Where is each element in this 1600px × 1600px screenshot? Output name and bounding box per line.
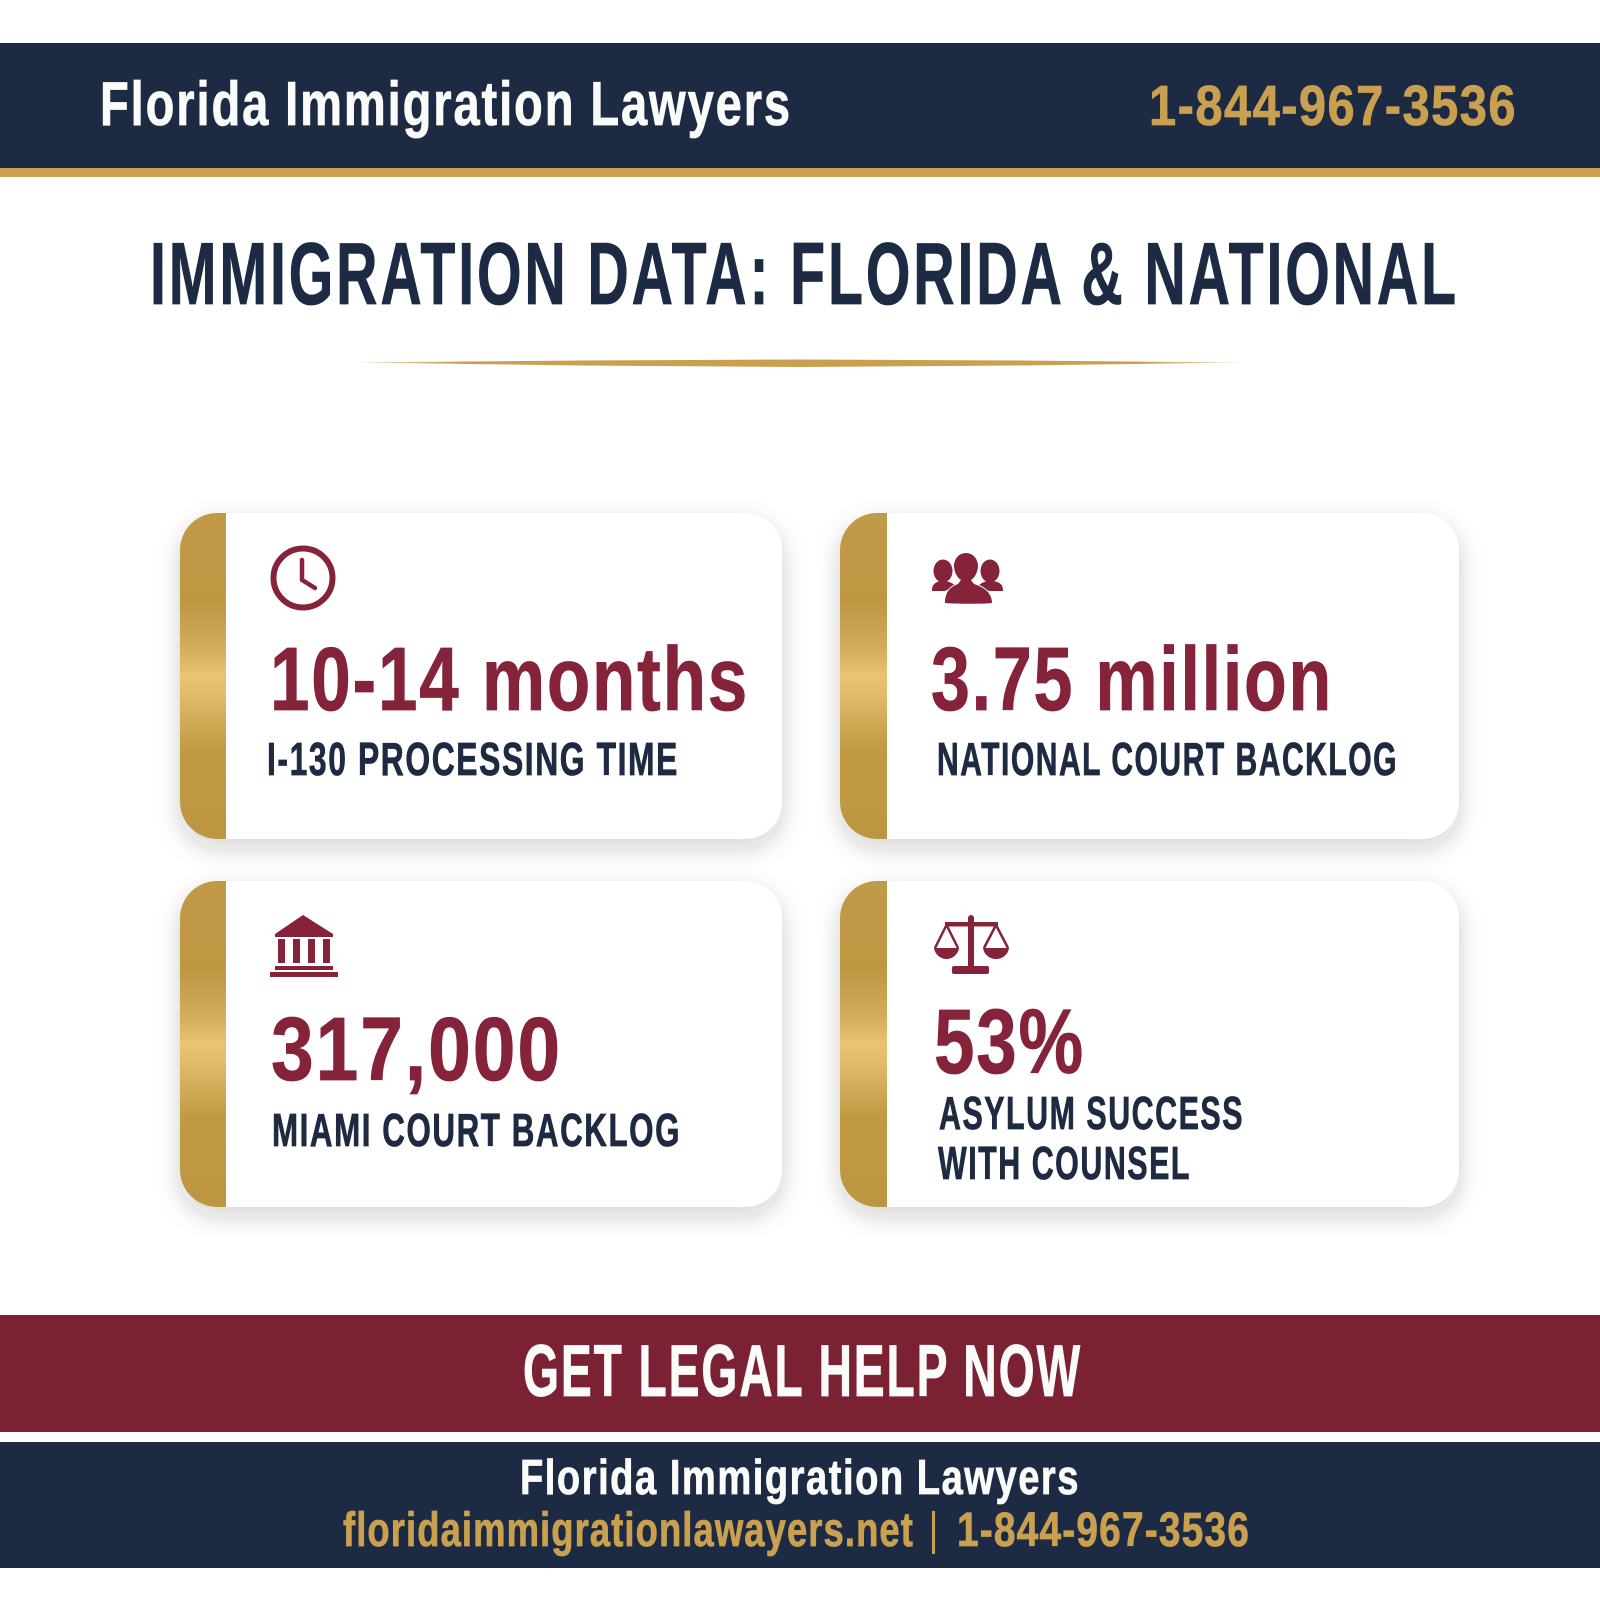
header firm name: Florida Immigration Lawyers	[100, 70, 792, 139]
stat: 10-14 months: 10-14 months	[270, 630, 749, 730]
panel: national court backlog	[840, 513, 1459, 839]
header bar	[0, 43, 1600, 177]
panel: Miami court backlog	[180, 881, 782, 1207]
stat: 3.75 million: 3.75 million	[931, 630, 1333, 730]
label: asylum success with counsel: WITH COUNSEL	[938, 1137, 1191, 1189]
call to action banner	[0, 1315, 1600, 1432]
icon: people	[932, 553, 1003, 604]
stat: 53%: 53%	[934, 991, 1085, 1093]
icon: courthouse	[270, 915, 338, 977]
footer firm name: Florida Immigration Lawyers	[520, 1451, 1080, 1505]
label: Miami court backlog: MIAMI COURT BACKLOG	[272, 1104, 681, 1156]
footer contact line: floridaimmigrationlawayers.net	[343, 1504, 914, 1557]
footer bar	[0, 1442, 1600, 1568]
title underline	[354, 360, 1245, 367]
panel: asylum success with counsel	[840, 881, 1459, 1207]
panel: I-130 processing time	[180, 513, 782, 839]
icon: scales of justice	[934, 915, 1009, 974]
footer contact line: 1-844-967-3536	[957, 1504, 1250, 1557]
call to action text: GET LEGAL HELP NOW	[523, 1331, 1082, 1412]
header phone number: 1-844-967-3536	[1149, 74, 1517, 138]
label: I-130 processing time: I-130 PROCESSING TIME	[267, 733, 679, 785]
label: asylum success with counsel: ASYLUM SUCCESS	[939, 1087, 1244, 1139]
label: asylum success with counsel	[938, 1087, 1244, 1189]
stat: 317,000: 317,000	[271, 1000, 562, 1100]
icon: clock	[274, 548, 332, 608]
